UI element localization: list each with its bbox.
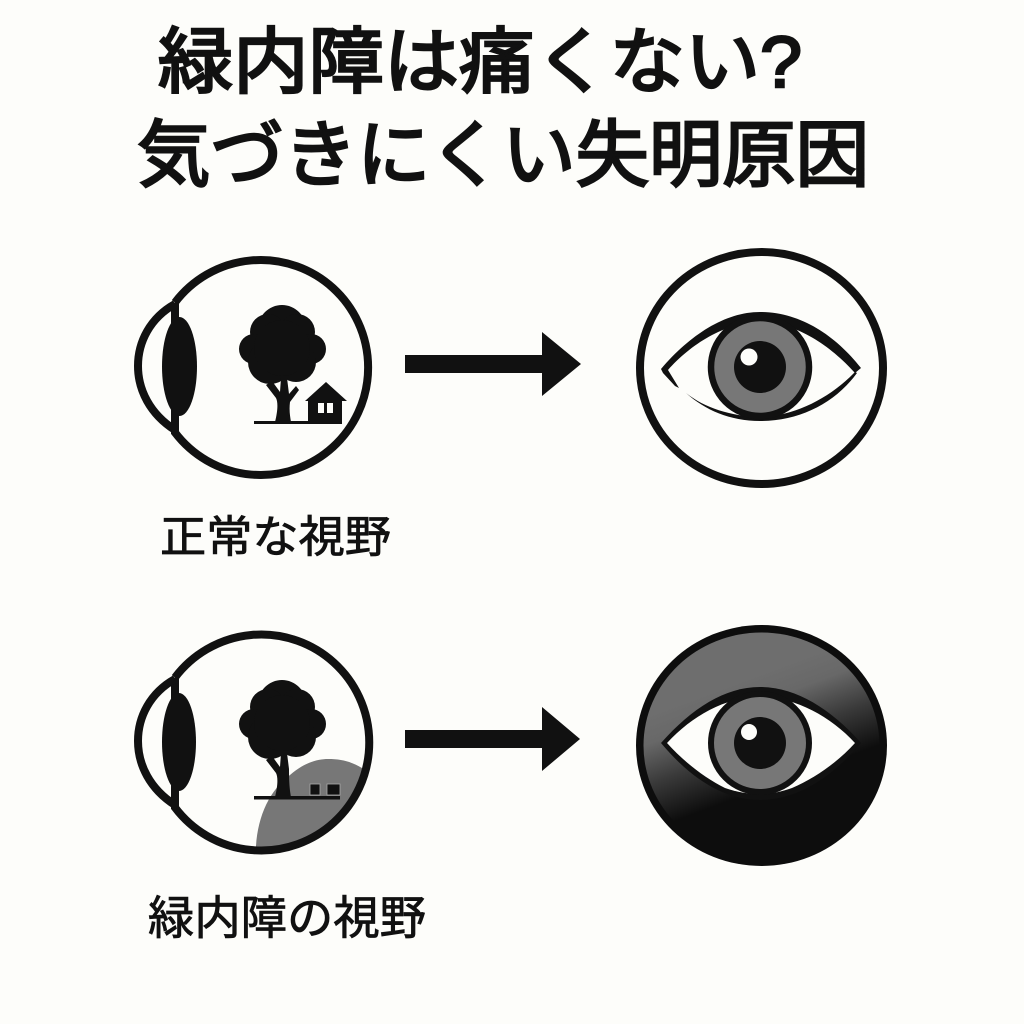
ground line	[254, 421, 342, 424]
outer ring	[640, 252, 883, 484]
arrow: glaucoma	[405, 707, 580, 771]
label: normal vision: 正常な視野	[160, 513, 391, 562]
tree	[239, 305, 326, 422]
lens	[162, 317, 197, 416]
arrow: normal	[405, 332, 581, 396]
dark disc	[636, 625, 887, 866]
house	[305, 382, 347, 422]
highlight	[740, 348, 758, 366]
house remnants	[310, 784, 340, 795]
pupil	[734, 341, 786, 393]
icon: normal eye in circle	[640, 252, 883, 484]
cornea	[138, 679, 175, 805]
icon: glaucoma eyeball cross-section	[138, 634, 380, 880]
title line 1: 緑内障は痛くない?	[158, 23, 802, 103]
lens	[162, 693, 196, 791]
iris	[711, 318, 809, 416]
title	[137, 23, 869, 196]
eye outline band	[661, 687, 861, 800]
icon: normal eyeball cross-section	[138, 260, 368, 475]
eyeball outline	[175, 260, 368, 475]
label: glaucoma vision: 緑内障の視野	[148, 892, 426, 944]
gray vision loss area	[256, 759, 362, 846]
ground line	[254, 796, 340, 800]
upper eyelid	[661, 312, 861, 388]
dimmed field	[644, 632, 880, 858]
icon: glaucoma eye with darkened vision	[636, 625, 887, 866]
pupil	[734, 717, 786, 769]
lower eyelid	[686, 372, 857, 421]
sclera	[667, 697, 855, 794]
title line 2: 気づきにくい失明原因	[137, 115, 869, 196]
highlight	[741, 724, 757, 740]
cornea	[138, 304, 175, 430]
tree	[239, 680, 326, 797]
eyeball outline	[175, 634, 369, 850]
iris	[711, 694, 809, 792]
